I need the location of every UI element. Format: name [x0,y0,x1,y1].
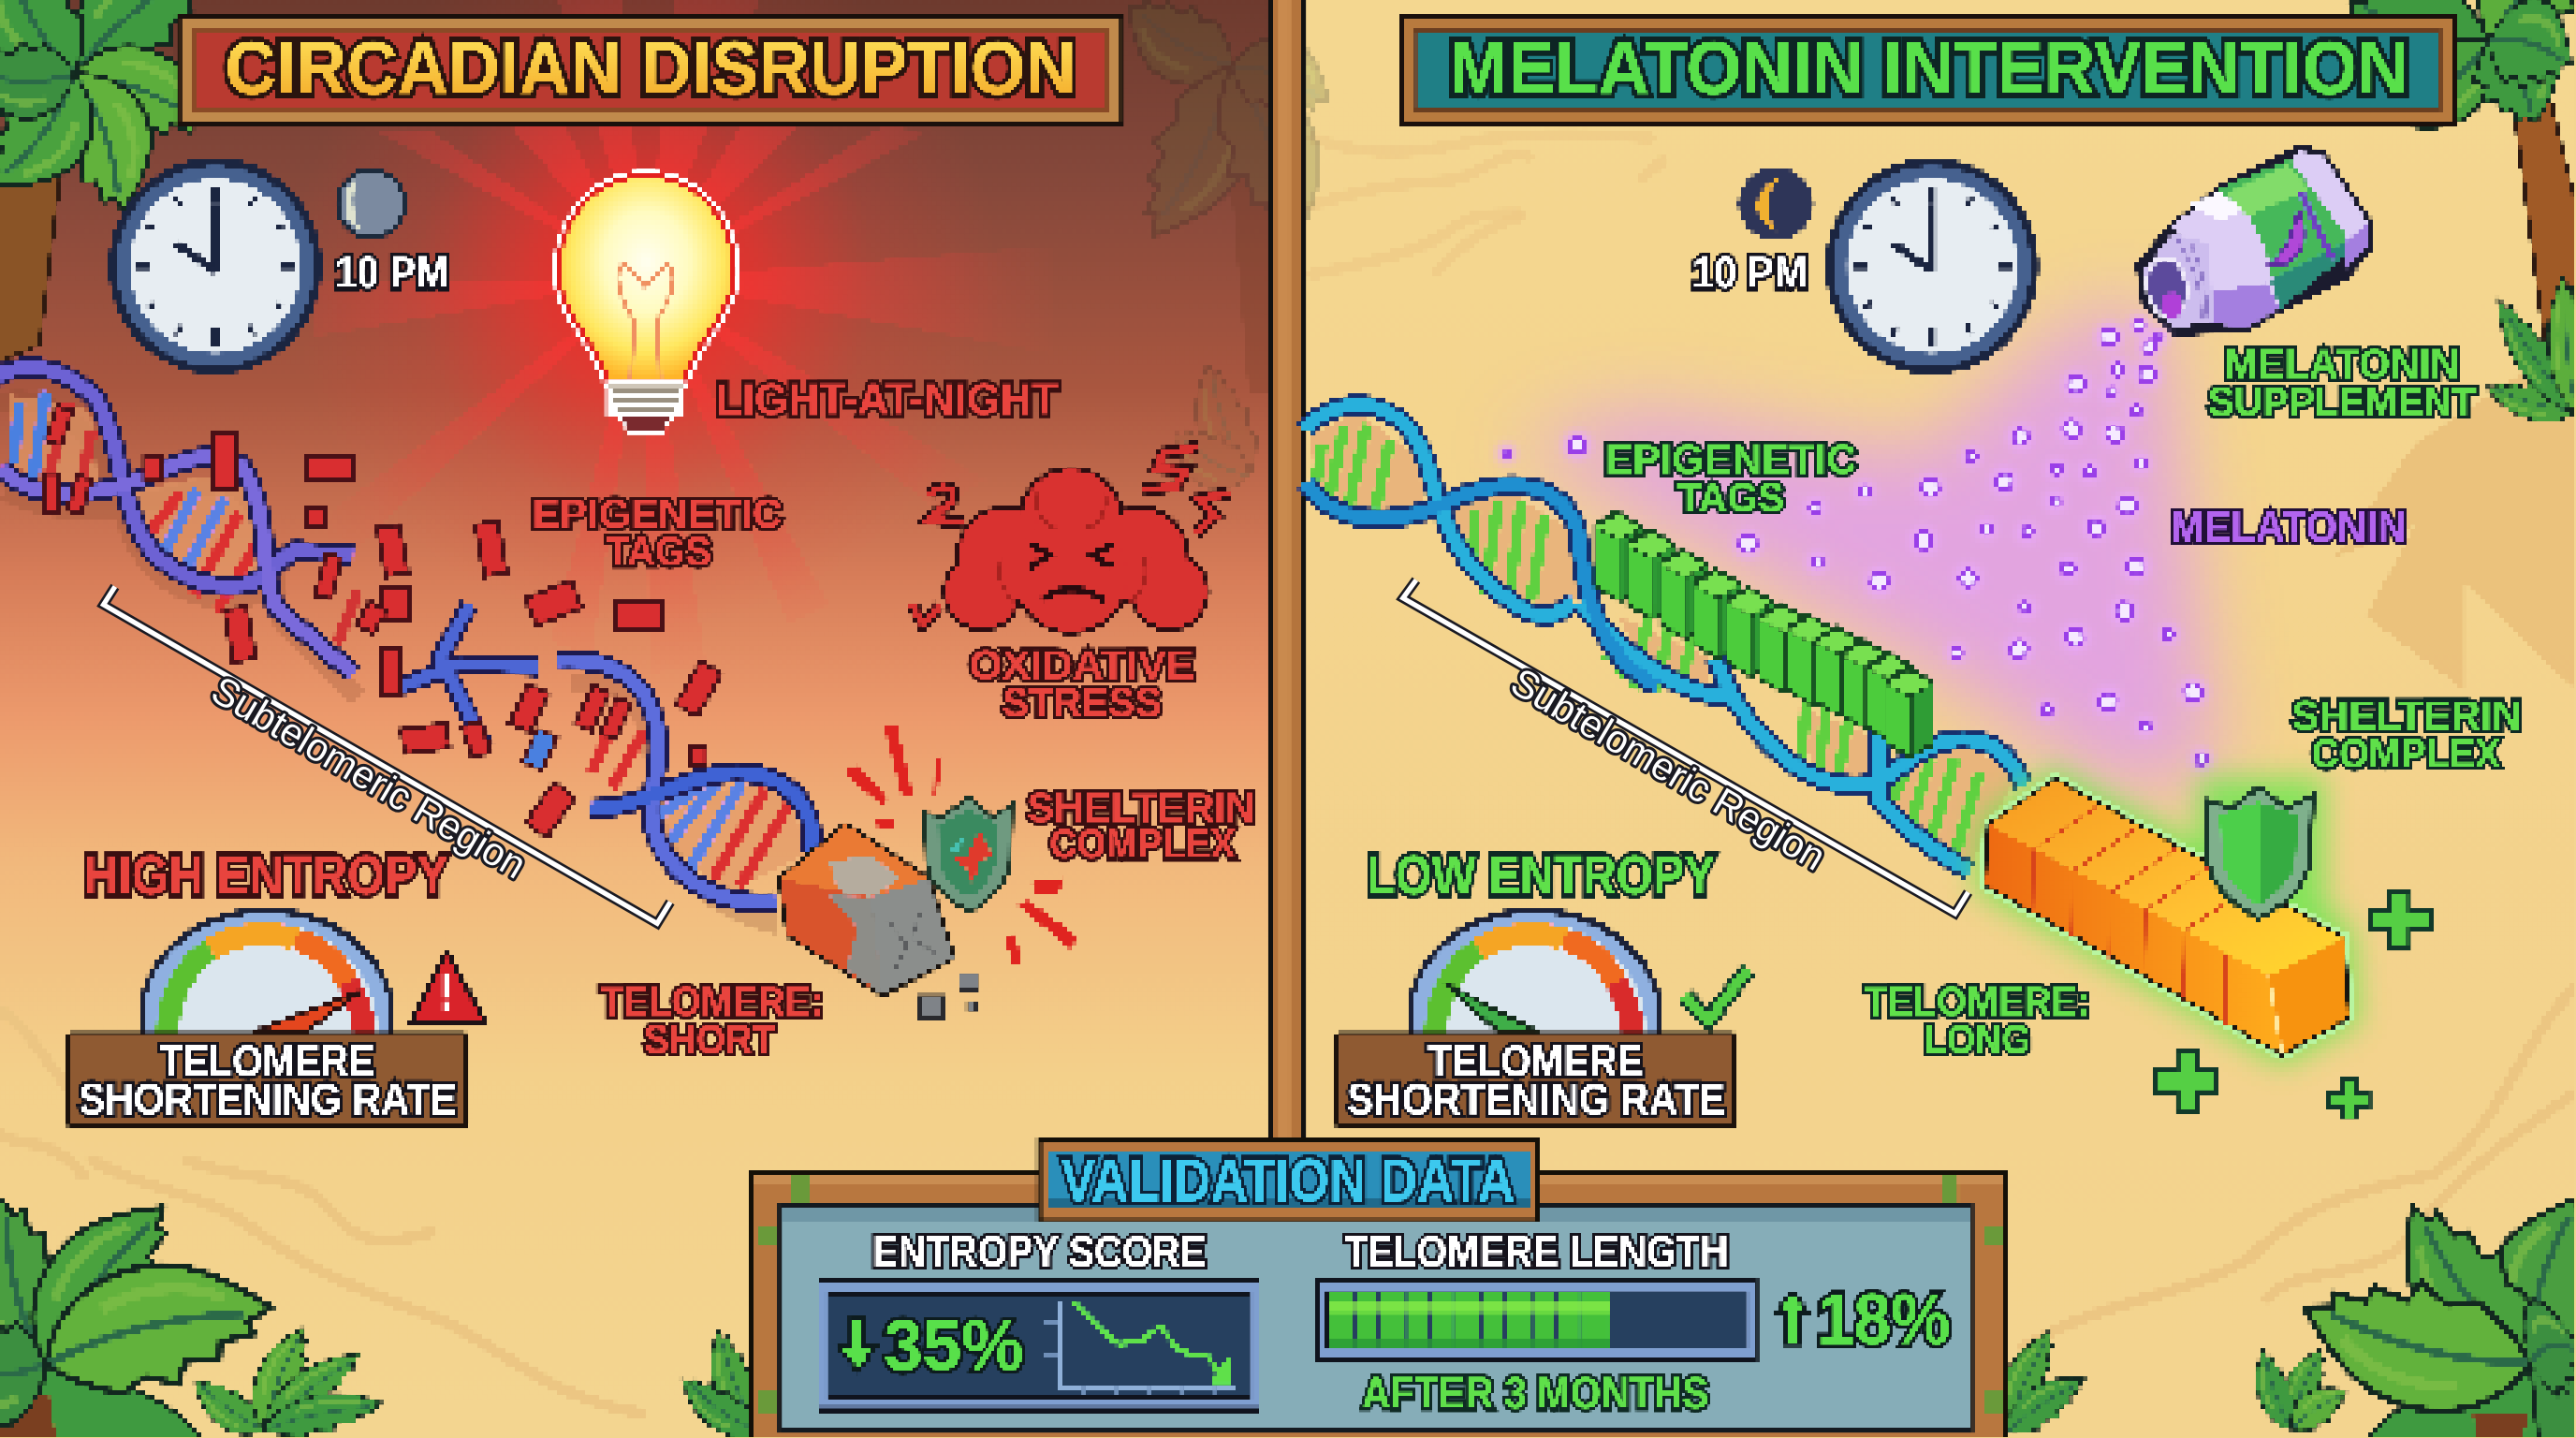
sparkline chart [1045,1299,1236,1395]
heading: validation data: VALIDATION DATA [1061,1146,1515,1214]
palm: top-left [0,0,237,361]
label: epigenetic tags (left): TAGS [607,529,711,575]
icon: up arrow [1775,1292,1810,1344]
label: shelterin complex (left): SHELTERIN [1027,785,1255,831]
palm: top-right [2334,0,2576,381]
sign: validation data [1036,1137,1541,1223]
heading: entropy score: ENTROPY SCORE [872,1227,1206,1277]
title: melatonin intervention: MELATONIN INTERVENTION [1449,26,2408,110]
palm: dim top-right of left panel [1106,0,1346,504]
debris rubble [920,975,979,1019]
label: telomere short: TELOMERE: [600,979,823,1025]
shelterin shield: healthy [2206,787,2313,918]
light bulb [559,176,735,433]
label: telomere short: SHORT [644,1017,776,1063]
melatonin purple haze [1512,312,2217,788]
label: low entropy: LOW ENTROPY [1367,844,1715,906]
cracked shelterin shield [925,797,1012,912]
subtelomeric bracket: left [104,587,670,923]
label: after 3 months: AFTER 3 MONTHS [1362,1369,1708,1418]
shrub: right of data panel [1985,1321,2094,1438]
label: melatonin supplement [2208,342,2476,425]
label: shelterin complex (right) [2291,693,2522,777]
background: left panel dusk sand [0,0,1273,1438]
heading: telomere length: TELOMERE LENGTH [1344,1227,1728,1277]
label: telomere shortening rate (left): SHORTENING RATE [79,1075,457,1124]
oxidative stress cloud [912,447,1229,631]
title: circadian disruption: CIRCADIAN DISRUPTION [225,26,1076,110]
entropy screen [818,1278,1260,1413]
label: oxidative stress [970,642,1194,726]
long telomere bar [1986,781,2348,1053]
label: telomere shortening rate (right): SHORTENING RATE [1347,1075,1725,1124]
gauge: low entropy [1408,907,1662,1035]
center wooden divider [1266,0,1308,1151]
time label: right: 10 PM [1692,248,1808,298]
subtelomeric bracket: left: Subtelomeric Region [204,668,534,888]
label: telomere shortening rate (left): TELOMERE [159,1037,374,1087]
label: shelterin complex (right): COMPLEX [2311,731,2500,777]
label: melatonin supplement: SUPPLEMENT [2208,379,2476,425]
clock: left [109,157,322,374]
title plate: circadian disruption [176,15,1125,126]
plate: shortening rate (right) [1334,1032,1738,1127]
label: epigenetic tags (left): EPIGENETIC [533,491,782,536]
label: shelterin complex (left): COMPLEX [1050,821,1236,867]
label: telomere long [1865,979,2089,1063]
panel: validation data [749,1137,2009,1438]
plus icons [2157,890,2430,1120]
plate: shortening rate (left) [66,1032,470,1127]
icon: down arrow [840,1318,875,1372]
subtelomeric bracket: right: Subtelomeric Region [1504,659,1833,879]
value: minus 35 percent: 35% [884,1306,1023,1387]
scattered epigenetic tags [44,405,722,838]
clock: right [1825,157,2039,374]
label: telomere shortening rate (right) [1347,1037,1725,1124]
moon: left [335,168,407,240]
label: high entropy: HIGH ENTROPY [84,844,448,906]
subtelomeric bracket: right [1403,580,1969,914]
palm shadow on sand [2333,337,2576,690]
melatonin bottle [2137,146,2371,333]
label: telomere long: LONG [1924,1017,2030,1063]
green glow around telomere [1986,781,2348,1053]
red light glow [292,0,1051,674]
green epigenetic tags [1593,509,1934,759]
palm: bottom-left [0,1172,388,1438]
shrub: left of data panel [669,1323,776,1438]
label: telomere long: TELOMERE: [1865,979,2089,1025]
background: right panel sand [1273,0,2576,1438]
label: epigenetic tags (right): EPIGENETIC [1605,436,1856,482]
label: melatonin: MELATONIN [2170,503,2407,552]
label: oxidative stress: STRESS [1003,680,1162,726]
moon: right [1738,168,1814,240]
time label: left: 10 PM [335,248,448,298]
DNA: damaged helix [0,368,812,925]
telomere length bar [1316,1278,1758,1364]
title plate: melatonin intervention [1398,15,2456,126]
impact sparks [844,726,1077,966]
melatonin particles [1502,320,2207,765]
label: shelterin complex (left) [1027,785,1255,867]
shrub: right edge [2480,273,2576,430]
palm: bottom-right [2244,1181,2576,1438]
label: epigenetic tags (right) [1605,436,1856,521]
DNA: healthy helix [1306,405,2024,871]
label: telomere short [600,979,823,1063]
label: telomere shortening rate (left) [79,1037,457,1124]
damaged telomere block [781,825,953,994]
value: plus 18 percent: 18% [1817,1280,1950,1360]
vines on frame [757,1177,2002,1415]
label: light-at-night: LIGHT-AT-NIGHT [716,374,1058,424]
label: shelterin complex (right): SHELTERIN [2291,693,2522,739]
label: epigenetic tags (right): TAGS [1677,475,1784,521]
warning triangle [411,951,487,1023]
label: epigenetic tags (left) [533,491,782,575]
label: telomere shortening rate (right): TELOMERE [1427,1037,1643,1087]
check mark [1686,970,1748,1020]
label: melatonin supplement: MELATONIN [2224,342,2459,388]
gauge: high entropy [139,907,394,1035]
label: oxidative stress: OXIDATIVE [970,642,1194,688]
